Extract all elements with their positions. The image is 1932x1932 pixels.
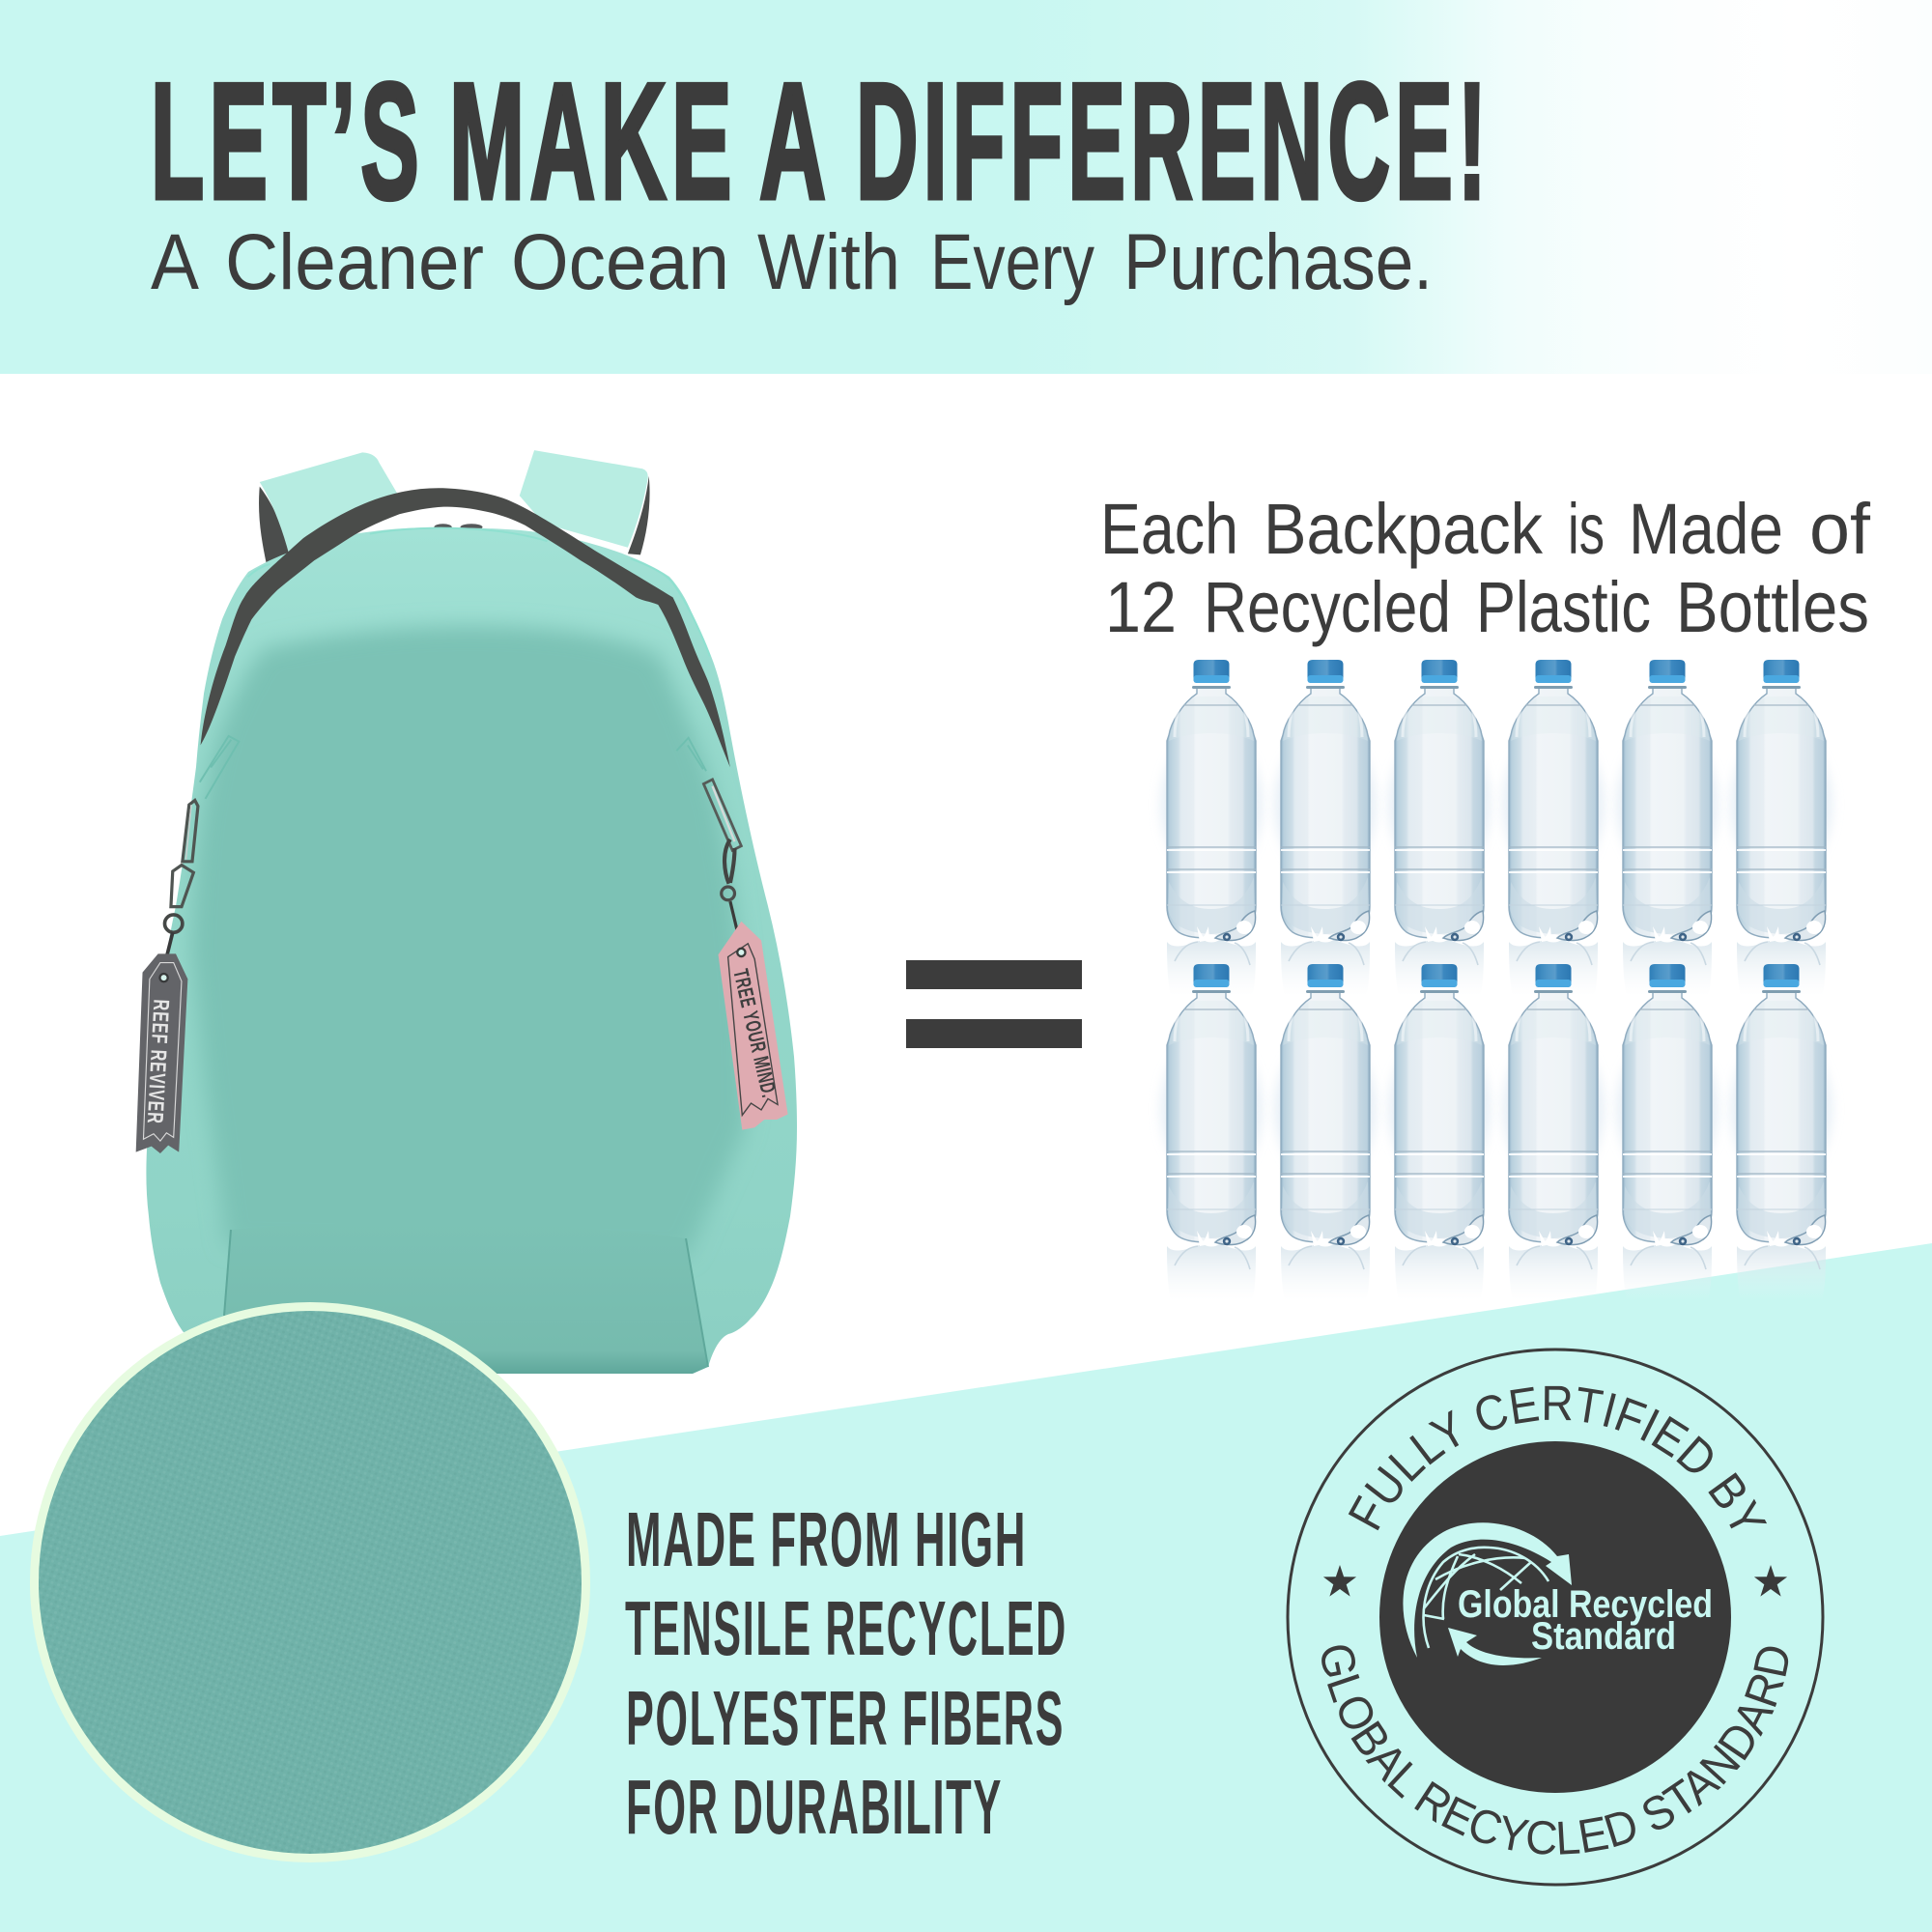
- badge inner disc: [1379, 1441, 1731, 1793]
- bottom diagonal panel: [0, 1243, 1932, 1932]
- badge top arc text: FULLY CERTIFIED BY: [1349, 1385, 1767, 1530]
- heading: bottles: Each: [1100, 489, 1238, 569]
- heading: bottles: Plastic: [1476, 567, 1651, 647]
- recycled polyester text: TENSILE RECYCLED: [625, 1585, 1067, 1671]
- title: A: [759, 49, 826, 234]
- badge outer ring: [1288, 1350, 1823, 1885]
- subtitle: [151, 218, 1433, 306]
- right zipper hardware and pink tag: [703, 780, 788, 1130]
- backpack front panel: [191, 626, 747, 1374]
- subtitle: Every: [930, 218, 1094, 306]
- heading: bottles: Made: [1629, 489, 1783, 569]
- subtitle: Cleaner: [225, 218, 484, 306]
- global recycled standard logo: [1403, 1522, 1713, 1665]
- recycled polyester text: POLYESTER FIBERS: [626, 1675, 1065, 1761]
- backpack body: [146, 527, 797, 1374]
- backpack straps: [259, 450, 650, 563]
- twelve plastic bottles: [1161, 660, 1832, 1300]
- gray tag: Reef Reviver: [136, 953, 187, 1153]
- gray tag: Reef Reviver: REEF REVIVER: [143, 999, 174, 1125]
- subtitle: Ocean: [511, 218, 729, 306]
- heading: bottles: 12: [1105, 567, 1177, 647]
- recycled polyester text: MADE FROM HIGH: [626, 1496, 1027, 1582]
- header band: [0, 0, 1932, 374]
- fabric close-up circle: [30, 1302, 590, 1862]
- heading: bottles: Bottles: [1676, 567, 1869, 647]
- backpack illustration: [136, 450, 797, 1374]
- title: MAKE: [449, 49, 737, 234]
- heading: bottles: Backpack: [1264, 489, 1544, 569]
- heading: bottles: is: [1568, 489, 1605, 569]
- pink tag: Tree Your Mind: [719, 922, 788, 1130]
- bottle row 1: [1161, 660, 1832, 996]
- subtitle: With: [757, 218, 900, 306]
- left zipper hardware and gray tag: [136, 800, 198, 1153]
- recycled polyester text: [625, 1496, 1067, 1850]
- backpack handle: [201, 488, 730, 767]
- badge bottom arc text: GLOBAL RECYCLED STANDARD: [1321, 1645, 1789, 1855]
- heading: bottles: [1100, 489, 1870, 647]
- global recycled standard logo: Global Recycled: [1458, 1583, 1713, 1626]
- top zip piping: [248, 528, 710, 657]
- heading: bottles: Recycled: [1204, 567, 1451, 647]
- badge stars: [1323, 1565, 1787, 1597]
- title: [151, 49, 1492, 234]
- subtitle: A: [151, 218, 199, 306]
- global recycled standard logo: Standard: [1531, 1615, 1676, 1658]
- subtitle: Purchase.: [1123, 218, 1433, 306]
- pink tag: Tree Your Mind: TREE YOUR MIND.: [728, 967, 781, 1100]
- pocket zipper slits: [200, 736, 706, 799]
- title: LET’S: [151, 49, 424, 234]
- bottom seams: [224, 1230, 708, 1367]
- bottle row 2: [1161, 964, 1832, 1300]
- recycled polyester text: FOR DURABILITY: [626, 1764, 1003, 1850]
- equals sign: [906, 960, 1082, 1048]
- heading: bottles: of: [1809, 489, 1870, 569]
- certification badge: [1287, 1349, 1824, 1886]
